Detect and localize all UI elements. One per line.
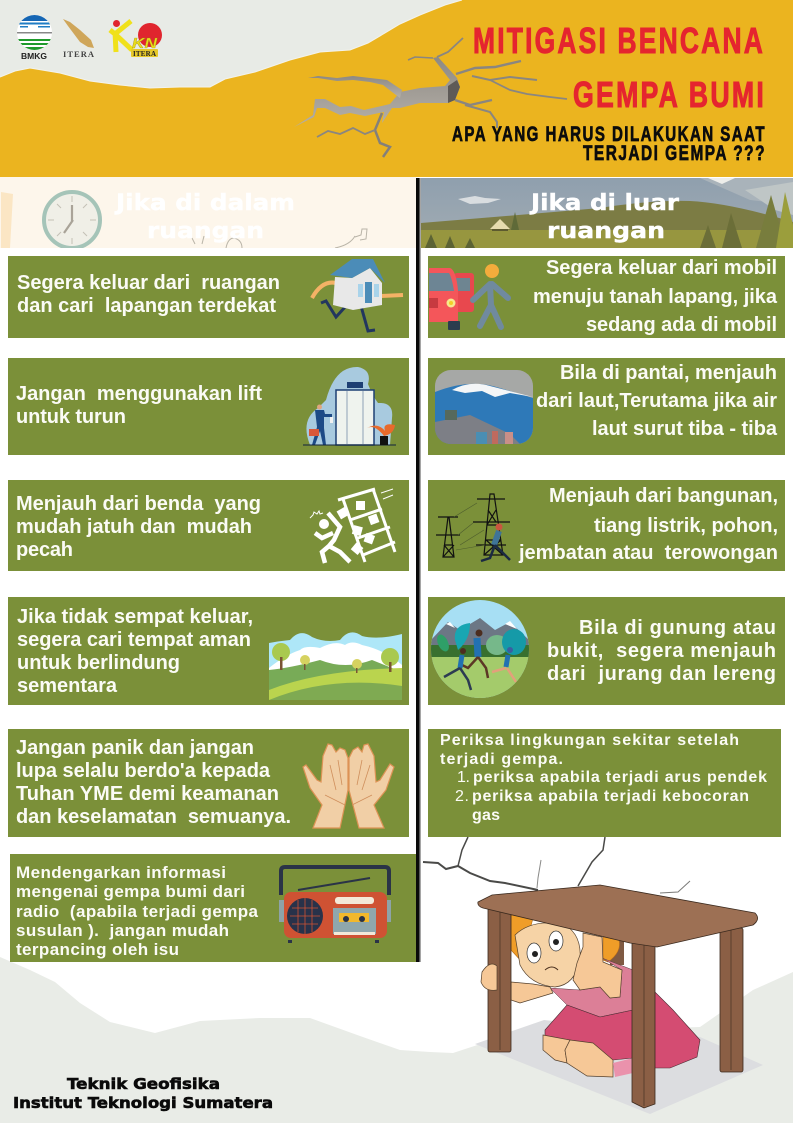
text [16, 863, 259, 959]
back table leg [610, 935, 624, 965]
text [536, 362, 778, 440]
dress top [550, 958, 633, 1017]
logo: KKN ITERA: KN [132, 35, 158, 52]
panel header: outdoors [421, 178, 793, 248]
footer credit [13, 1075, 273, 1112]
text: Jangan panik dan jangan [16, 737, 254, 759]
right table leg [720, 928, 743, 1072]
text: terjadi gempa. [440, 751, 563, 768]
illustration: girl under table [475, 885, 763, 1114]
icon: radio [279, 867, 391, 943]
text: Jika tidak sempat keluar, [17, 606, 253, 628]
card: jangan panik [8, 729, 409, 837]
table top [478, 885, 758, 947]
logos [15, 15, 162, 61]
icon: praying hands [303, 744, 394, 828]
icon: running house [312, 259, 403, 331]
text: Bila di gunung atau [579, 617, 776, 639]
card: periksa lingkungan [428, 729, 781, 837]
footer credit: Institut Teknologi Sumatera [13, 1094, 273, 1112]
text: Menjauh dari bangunan, [549, 485, 778, 507]
text: periksa apabila terjadi kebocoran [472, 788, 749, 805]
card: keluar dari mobil [428, 256, 785, 338]
text: untuk berlindung [17, 652, 180, 674]
card: jangan menggunakan lift [8, 358, 409, 455]
text [17, 272, 280, 317]
text: Tuhan YME demi keamanan [16, 783, 279, 805]
icon: falling shelf [310, 489, 395, 563]
text: periksa apabila terjadi arus pendek [473, 769, 767, 786]
card: gunung [428, 597, 785, 705]
logo: BMKG: BMKG [21, 51, 47, 61]
icon: wall clock [1, 192, 367, 248]
icon: car and pedestrian [429, 264, 508, 330]
text: Periksa lingkungan sekitar setelah [440, 732, 739, 749]
title [473, 20, 766, 115]
text: Mendengarkan informasi [16, 863, 226, 882]
header band: torn yellow paper [0, 0, 793, 177]
heading: outdoors: ruangan [547, 219, 665, 244]
centre divider [416, 178, 421, 962]
text: dari laut,Terutama jika air [536, 390, 777, 412]
text: untuk turun [16, 406, 126, 428]
card: bangunan [428, 480, 785, 571]
text: sedang ada di mobil [586, 314, 777, 336]
logo: KKN ITERA [110, 20, 162, 58]
text: Menjauh dari benda yang [16, 493, 261, 515]
card: radio information [10, 854, 416, 962]
text: pecah [16, 539, 73, 561]
hand gripping leg [481, 964, 497, 990]
table shadow [475, 1020, 763, 1114]
text: mengenai gempa bumi dari [16, 882, 245, 901]
card: keluar dari ruangan [8, 256, 409, 338]
card: tempat aman [8, 597, 409, 705]
heading: indoors: ruangan [147, 219, 264, 244]
text: 2. [455, 788, 469, 805]
logo: ITERA [63, 19, 95, 59]
text: lupa selalu berdo'a kepada [16, 760, 271, 782]
background: torn grey paper bottom [0, 957, 793, 1123]
logo: ITERA: ITERA [63, 49, 95, 59]
background: torn grey paper top [0, 0, 793, 100]
text [518, 485, 778, 564]
text: dan cari lapangan terdekat [17, 295, 276, 317]
text: sementara [17, 675, 118, 697]
hair [511, 915, 620, 962]
text: Bila di pantai, menjauh [560, 362, 777, 384]
icon: tsunami [435, 370, 533, 444]
front table leg [632, 942, 655, 1108]
icon: wall cracks [423, 837, 690, 893]
text: dan keselamatan semuanya. [16, 806, 291, 828]
text [16, 383, 262, 428]
left arm [511, 982, 553, 1003]
text [533, 257, 778, 336]
card: menjauh dari benda [8, 480, 409, 571]
text [547, 617, 776, 685]
heading: indoors [114, 191, 295, 244]
text: 1. [457, 769, 470, 786]
icon: landscape [269, 632, 402, 700]
text: tiang listrik, pohon, [594, 515, 778, 537]
text: segera cari tempat aman [17, 629, 251, 651]
left back table leg [488, 908, 511, 1052]
logo: KKN ITERA: ITERA [133, 50, 156, 58]
text [16, 737, 291, 828]
icon: elevator [303, 367, 396, 445]
text [440, 732, 767, 824]
icon: runners [431, 600, 529, 701]
text: laut surut tiba - tiba [592, 418, 778, 440]
dress skirt [545, 992, 700, 1068]
footer credit: Teknik Geofisika [67, 1075, 220, 1093]
text: terpancing oleh isu [16, 940, 179, 959]
text: Segera keluar dari mobil [546, 257, 777, 279]
logo: BMKG [17, 15, 52, 59]
text: bukit, segera menjauh [547, 640, 776, 662]
text: radio (apabila terjadi gempa [16, 902, 259, 921]
text: gas [472, 807, 500, 824]
card: pantai [428, 358, 785, 455]
heading: outdoors [529, 191, 679, 244]
heading: indoors: Jika di dalam [114, 191, 295, 216]
text: Segera keluar dari ruangan [17, 272, 280, 294]
text: dari jurang dan lereng [547, 663, 776, 685]
text: mudah jatuh dan mudah [16, 516, 252, 538]
face [515, 923, 580, 987]
icon: power lines and person [436, 494, 510, 561]
text: susulan ). jangan mudah [16, 921, 229, 940]
arm over head [573, 933, 622, 998]
text: jembatan atau terowongan [518, 542, 778, 564]
heading: outdoors: Jika di luar [529, 191, 679, 216]
text: Jangan menggunakan lift [16, 383, 262, 405]
text [17, 606, 253, 697]
text [16, 493, 261, 561]
subtitle [452, 123, 766, 165]
panel header: indoors [0, 177, 416, 248]
legs [543, 1035, 633, 1077]
text: menuju tanah lapang, jika [533, 286, 778, 308]
icon: ground crack in header [294, 38, 567, 157]
